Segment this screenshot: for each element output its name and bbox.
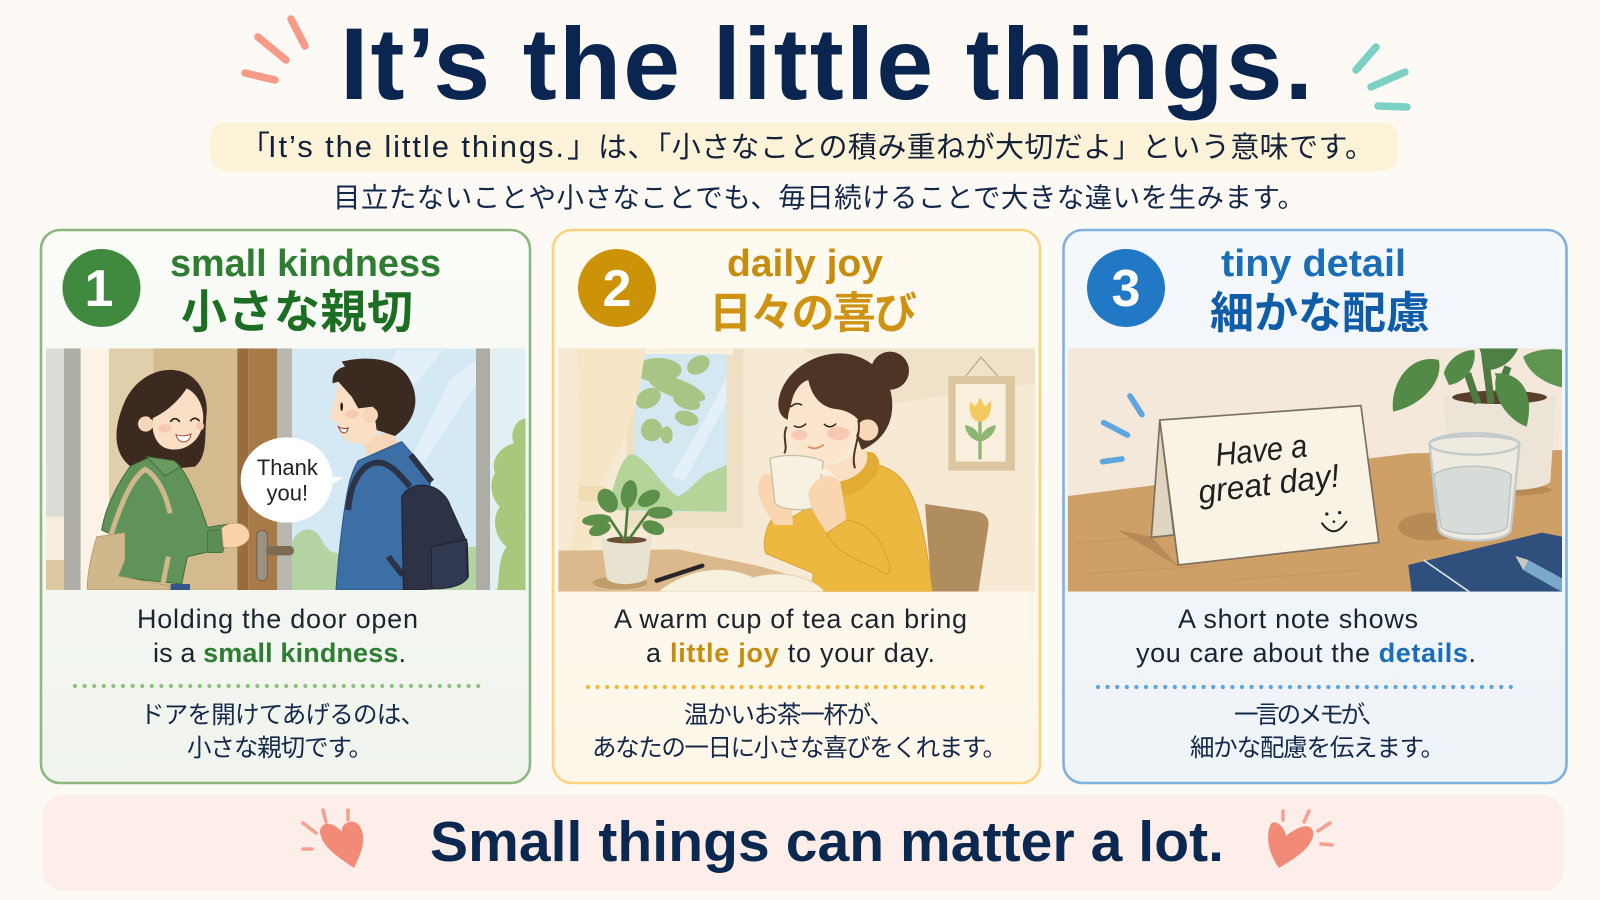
glass of water (1398, 433, 1520, 541)
subtitle pill: 」 (567, 131, 597, 164)
subtitle pill: は、「小さなことの積み重ねが大切だよ」という意味です。 (598, 131, 1374, 164)
heading: tiny detail: tiny detail (1221, 243, 1406, 285)
card text: japanese: 小さな親切です。 (187, 734, 373, 762)
heading: small kindness: 小さな親切 (181, 286, 413, 338)
card text: japanese: あなたの一日に小さな喜びをくれます。 (592, 734, 1007, 762)
number badge 1 (62, 249, 140, 327)
heading: small kindness: small kindness (170, 243, 441, 285)
speech bubble: you! (267, 481, 308, 506)
card text: japanese: 一言のメモが、 (1234, 701, 1386, 729)
potted plant (1393, 348, 1562, 496)
panel: daily joy (553, 230, 1040, 783)
card text: english (614, 604, 967, 668)
heading: small kindness (170, 243, 441, 338)
folded note: great day! (1196, 457, 1341, 510)
banner text: Small things can matter a lot. (430, 810, 1224, 874)
tree leaves (636, 355, 710, 444)
card text: english: Holding the door open (137, 604, 418, 634)
potted plant (582, 479, 673, 584)
folded note (1118, 406, 1379, 567)
folded note: Have a (1213, 427, 1309, 473)
speech bubble: Thank (257, 455, 319, 480)
card text: japanese (140, 702, 425, 762)
woman (116, 370, 207, 468)
heading: daily joy: 日々の喜び (709, 290, 917, 338)
number badge 2: 2 (603, 260, 631, 318)
card text: english: you care about the details. (1136, 638, 1476, 668)
title: It’s the little things. (340, 7, 1313, 121)
card text: english (137, 604, 418, 668)
icon: coral sparkle lines (245, 19, 305, 80)
blue sparkle lines (1103, 396, 1142, 462)
number badge 3: 3 (1112, 260, 1140, 318)
card text: english: A warm cup of tea can bring (614, 604, 967, 634)
icon: left heart (303, 810, 363, 868)
man (364, 432, 398, 455)
card text: japanese: ドアを開けてあげるのは、 (140, 702, 425, 729)
card text: english: a little joy to your day. (646, 638, 935, 668)
heading: tiny detail: 細かな配慮 (1210, 289, 1430, 338)
number badge 1: 1 (85, 260, 113, 318)
card text: japanese: 細かな配慮を伝えます。 (1190, 734, 1445, 762)
panel: tiny detail (1064, 230, 1566, 783)
card text: english: A short note shows (1178, 604, 1418, 634)
speech bubble (241, 437, 343, 523)
chair (925, 504, 989, 592)
number badge 3 (1087, 249, 1165, 327)
pen (657, 566, 702, 581)
door handle (257, 531, 267, 581)
framed tulip (948, 357, 1015, 471)
panel: small kindness (41, 230, 530, 783)
icon: teal sparkle lines (1356, 47, 1407, 107)
book (660, 570, 823, 592)
illustration: drinking tea (558, 348, 1035, 592)
icon: right heart (1268, 811, 1332, 868)
notebook (1408, 533, 1562, 592)
heading: tiny detail (1210, 243, 1430, 338)
subtitle pill: 「 (240, 131, 270, 164)
illustration: note on table (1068, 348, 1562, 592)
bottom banner (42, 795, 1564, 891)
card text: english: is a small kindness. (153, 638, 406, 668)
table (558, 549, 788, 592)
card text: japanese (592, 701, 1007, 762)
illustration: holding the door (46, 348, 526, 590)
card text: english (1136, 604, 1476, 668)
tea cup (770, 455, 823, 510)
subtitle second line: 目立たないことや小さなことでも、毎日続けることで大きな違いを生みます。 (333, 182, 1305, 213)
subtitle pill: It’s the little things. (268, 129, 564, 164)
heading: daily joy (709, 243, 917, 338)
card text: japanese (1190, 701, 1445, 762)
woman (758, 352, 932, 592)
subtitle pill (210, 122, 1398, 171)
card text: japanese: 温かいお茶一杯が、 (684, 701, 894, 729)
number badge 2 (578, 249, 656, 327)
heading: daily joy: daily joy (727, 243, 883, 285)
